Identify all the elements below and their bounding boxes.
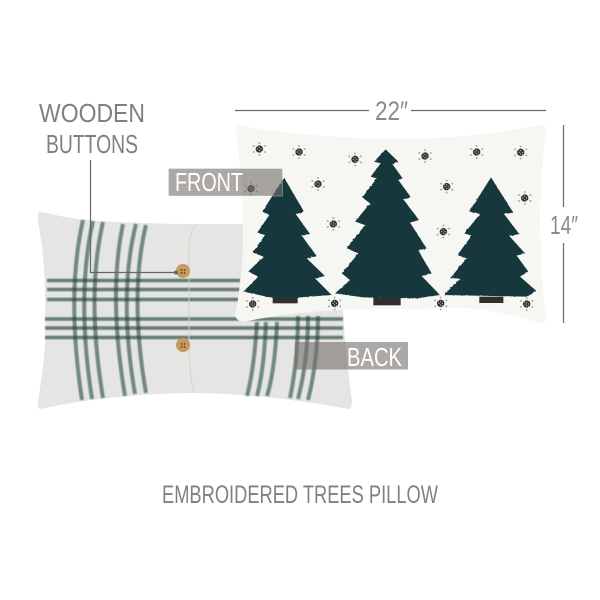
label: back [295, 342, 408, 372]
pillow back fabric [38, 212, 352, 409]
back pillow [38, 212, 352, 409]
trees and snowflakes [243, 142, 536, 311]
heading: wooden buttons: BUTTONS [46, 129, 138, 159]
leader line to button [90, 160, 178, 274]
heading: wooden buttons: WOODEN [39, 98, 145, 128]
snowflakes [244, 142, 533, 311]
left tree [243, 177, 332, 297]
tree trunks [273, 296, 503, 305]
plaid vertical stripes [74, 220, 318, 400]
right tree [444, 177, 536, 297]
front pillow [235, 125, 546, 323]
plaid horizontal stripes [45, 280, 343, 338]
heading: wooden buttons [39, 98, 145, 159]
center tree [335, 149, 440, 298]
pillow front fabric [235, 125, 546, 323]
placket seam [189, 224, 197, 392]
label: back: BACK [347, 342, 403, 372]
button: upper wooden button [176, 264, 190, 278]
label: front: FRONT [175, 167, 243, 197]
height dimension: 14 inches: 14″ [550, 210, 578, 240]
width dimension: 22 inches: 22″ [375, 96, 408, 126]
title: EMBROIDERED TREES PILLOW [162, 481, 438, 509]
button: lower wooden button [176, 338, 190, 352]
